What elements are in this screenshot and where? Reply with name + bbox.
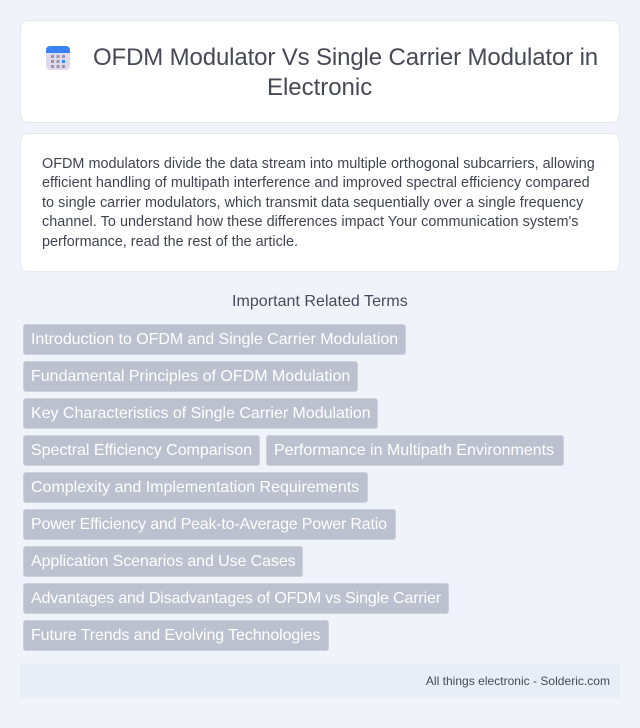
- text block: intro paragraph: performance, read the rest of the article.: [42, 234, 298, 250]
- tag: [23, 509, 396, 540]
- tag: [23, 620, 329, 651]
- text block: intro paragraph: OFDM modulators divide the data stream into multiple orthogonal subcarriers, allowing: [42, 156, 595, 172]
- tag list: [23, 324, 564, 651]
- tag: Fundamental Principles of OFDM Modulation: [31, 368, 350, 385]
- tag: Introduction to OFDM and Single Carrier Modulation: [31, 331, 398, 348]
- text block: intro paragraph: to single carrier modulators, which transmit data sequentially over a single frequency: [42, 194, 583, 210]
- text block: intro paragraph: [42, 156, 595, 250]
- tag: Key Characteristics of Single Carrier Modulation: [31, 405, 371, 422]
- title: Electronic: [267, 74, 372, 101]
- tag: [23, 361, 358, 392]
- tag: [266, 435, 564, 466]
- tag: Advantages and Disadvantages of OFDM vs Single Carrier: [31, 590, 441, 607]
- panel: title card: [20, 20, 620, 123]
- tag: Complexity and Implementation Requirements: [31, 479, 359, 496]
- tag: Spectral Efficiency Comparison: [31, 442, 252, 459]
- panel: intro card: [20, 133, 620, 272]
- icon: calendar: [46, 46, 70, 70]
- text block: intro paragraph: channel. To understand how these differences impact Your communication system's: [42, 214, 579, 230]
- tag: [23, 583, 449, 614]
- tag: Power Efficiency and Peak-to-Average Power Ratio: [31, 516, 387, 533]
- footer bar: [20, 664, 620, 698]
- tag: [23, 546, 303, 577]
- tag: [23, 472, 368, 503]
- title: [93, 44, 598, 101]
- tag: [23, 398, 378, 429]
- tag: [23, 324, 406, 355]
- heading: important related terms: Important Related Terms: [232, 293, 408, 310]
- text block: intro paragraph: efficient handling of multipath interference and improved spectral efficiency compared: [42, 175, 590, 191]
- tag: [23, 435, 260, 466]
- tag: Performance in Multipath Environments: [274, 442, 554, 459]
- title: OFDM Modulator Vs Single Carrier Modulator in: [93, 44, 598, 71]
- tag: Application Scenarios and Use Cases: [31, 553, 296, 570]
- footer text: All things electronic - Solderic.com: [426, 674, 610, 688]
- tag: Future Trends and Evolving Technologies: [31, 627, 320, 644]
